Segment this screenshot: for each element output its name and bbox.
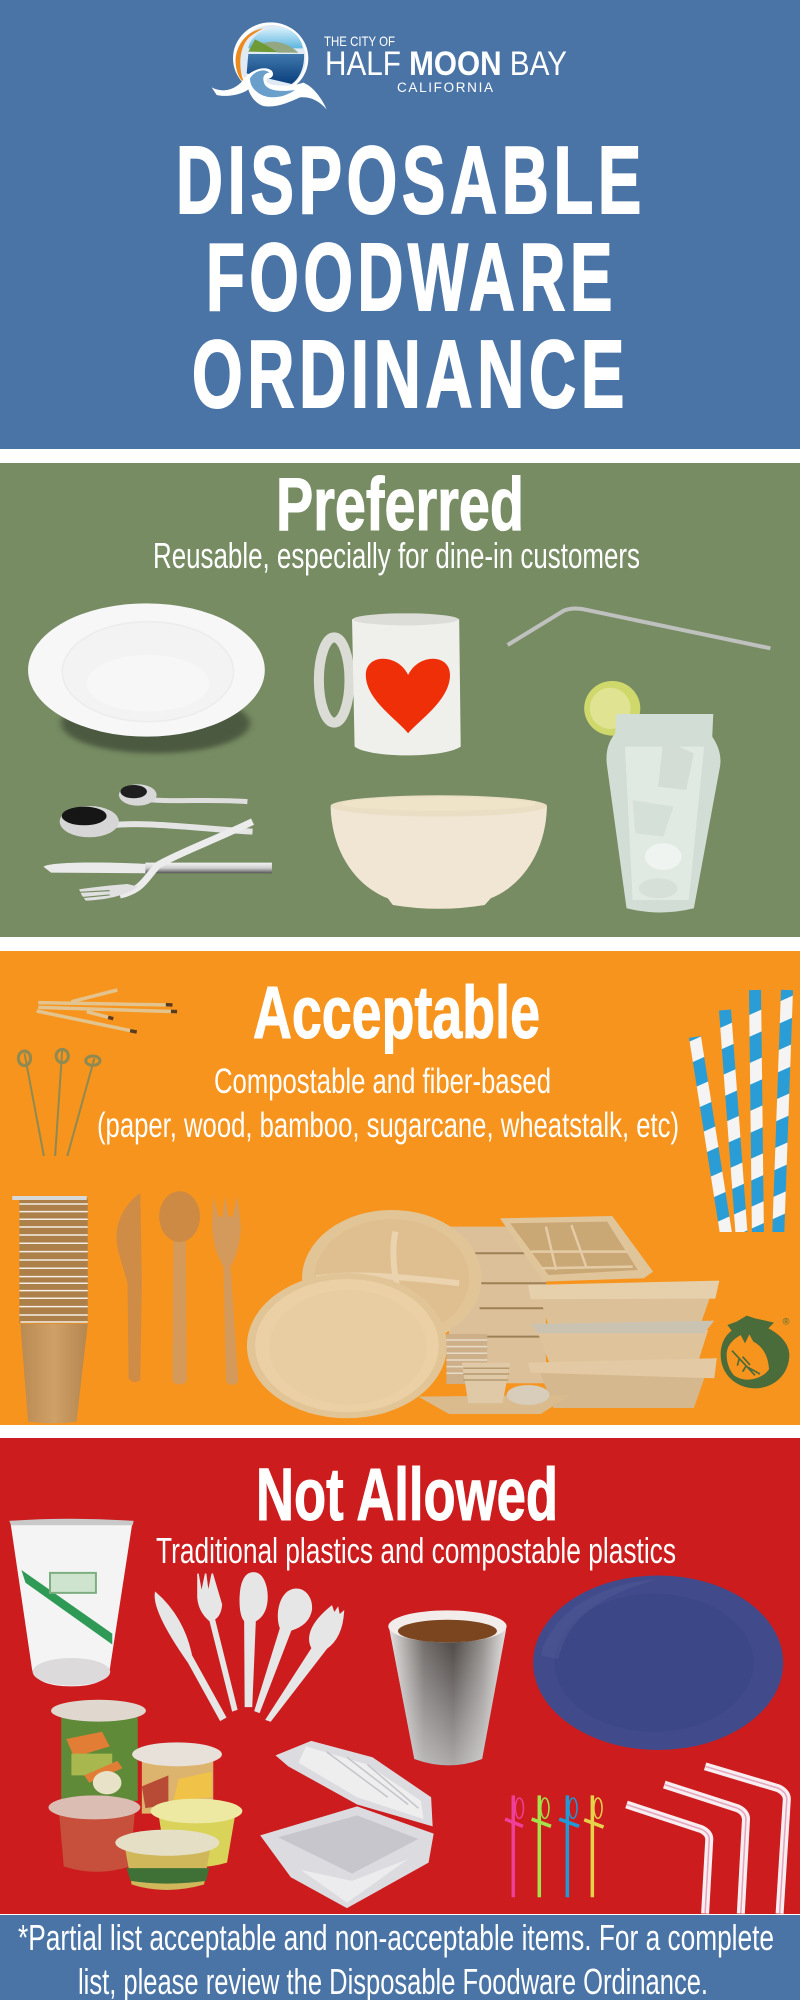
panel: not allowed [0, 1438, 800, 1914]
heading: preferred: Preferred [276, 462, 524, 546]
icon: three-compartment plate [302, 1210, 482, 1347]
icon: wooden knife [117, 1193, 142, 1382]
panel: acceptable [0, 951, 800, 1425]
logo: City of Half Moon Bay [212, 22, 567, 109]
icon: moon and wave emblem [212, 22, 327, 109]
registered mark: ® [783, 1316, 790, 1326]
title [176, 127, 646, 428]
icon: wooden spoon [159, 1191, 200, 1384]
icon: paper cup stack [12, 1196, 88, 1423]
icon: blue striped paper straws [695, 990, 787, 1240]
icon: cutlery [43, 784, 272, 901]
icon: leaf certification logo [721, 1316, 790, 1388]
footer text [18, 1917, 774, 2000]
icon: bamboo skewers bundle [37, 990, 177, 1032]
icon: fiber container stack [449, 1216, 719, 1408]
icon: cream bowl [331, 795, 547, 909]
icon: plastic cutlery [155, 1573, 343, 1721]
icon: heart mug [319, 613, 461, 755]
not allowed items [9, 1519, 787, 1914]
panel: preferred [0, 462, 800, 937]
panel: header [0, 0, 800, 449]
acceptable items [12, 990, 719, 1423]
icon: bendy plastic straws [627, 1766, 787, 1914]
icon: fiber plate [247, 1273, 447, 1418]
icon: compostable clear cup [9, 1519, 134, 1686]
heading: not allowed: Not Allowed [256, 1453, 558, 1536]
icon: cocktail sword picks [505, 1795, 604, 1897]
logo text: california: CALIFORNIA [397, 80, 493, 95]
icon: small cups and tray [418, 1334, 570, 1414]
panel: footer note [0, 1915, 800, 2000]
icon: plastic cup with cola [388, 1610, 507, 1765]
subheading: compostable and fiber-based: Compostable and fiber-based [214, 1062, 551, 1101]
icon: clear clamshell container [260, 1741, 434, 1908]
preferred items [28, 603, 770, 912]
icon: blue plate [533, 1575, 783, 1750]
heading: acceptable: Acceptable [253, 971, 540, 1054]
icon: deli containers with food [48, 1700, 242, 1890]
logo text: half moon bay: HALF MOON BAY [325, 45, 567, 83]
icon: knotted bamboo picks [18, 1049, 100, 1156]
icon: wooden fork [212, 1196, 241, 1385]
icon: steel straw [508, 608, 770, 648]
icon: glass with lime [584, 681, 720, 912]
logo text: the city of: THE CITY OF [324, 33, 395, 49]
icon: white plate [28, 603, 265, 753]
